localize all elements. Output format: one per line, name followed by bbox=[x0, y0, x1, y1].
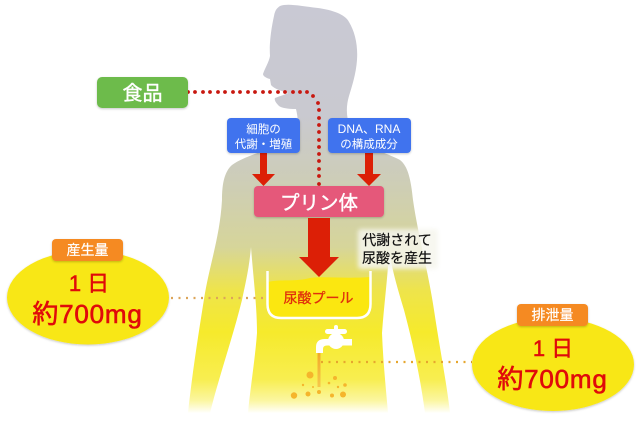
callout: excretion: 排泄量 bbox=[532, 307, 574, 323]
callout: excretion: 1 日 bbox=[533, 336, 573, 361]
dotted line: production bbox=[171, 297, 266, 299]
box: cell metabolism bbox=[227, 118, 300, 153]
metabolized label bbox=[362, 232, 432, 266]
purine box: プリン体 bbox=[280, 192, 358, 214]
callout: production: 産生量 bbox=[66, 242, 108, 258]
box: cell metabolism: 細胞の bbox=[246, 122, 281, 136]
callout: production bbox=[7, 239, 169, 344]
metabolized label: 代謝されて bbox=[362, 232, 432, 248]
uric acid drops bbox=[291, 372, 347, 399]
callout: production: 約700mg bbox=[32, 299, 143, 329]
dotted line: food to purine bbox=[186, 90, 321, 186]
icon: faucet bbox=[316, 325, 352, 353]
arrow: cell metabolism to purine bbox=[252, 153, 275, 186]
callout: excretion bbox=[472, 304, 634, 411]
water stream bbox=[318, 353, 320, 387]
box: DNA RNA: の構成成分 bbox=[340, 138, 398, 151]
dotted line: excretion bbox=[321, 361, 472, 363]
callout: production: 1 日 bbox=[69, 271, 109, 296]
arrow: purine to uric acid pool bbox=[299, 218, 339, 277]
box: cell metabolism: 代謝・増殖 bbox=[235, 138, 293, 151]
metabolized label: 尿酸を産生 bbox=[362, 250, 432, 266]
arrow: DNA RNA to purine bbox=[357, 153, 381, 186]
human body silhouette bbox=[188, 5, 450, 413]
uric acid pool bbox=[268, 271, 370, 318]
box: DNA RNA: DNA、RNA bbox=[338, 122, 400, 136]
food box: 食品 bbox=[122, 82, 162, 105]
white label backdrop bbox=[358, 229, 438, 269]
uric acid pool: 尿酸プール bbox=[284, 290, 354, 306]
callout: excretion: 約700mg bbox=[497, 364, 608, 394]
food box bbox=[97, 77, 188, 108]
purine box bbox=[254, 186, 384, 217]
box: DNA RNA bbox=[328, 118, 411, 153]
